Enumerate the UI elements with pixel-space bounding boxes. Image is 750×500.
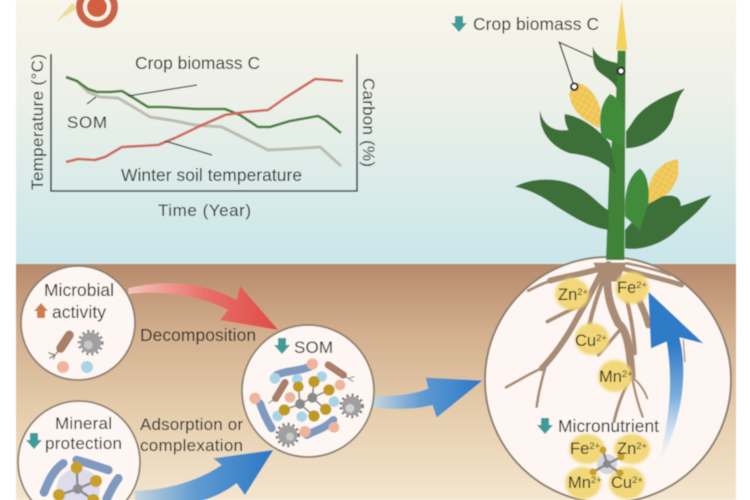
label: winter soil temperature: Winter soil temperature [121, 165, 302, 185]
callout lines [559, 42, 593, 87]
icon: mineral complex [44, 460, 118, 500]
panel: SOM [242, 325, 374, 457]
label: SOM: SOM [294, 338, 333, 357]
arrow: SOM to micronutrient [373, 378, 482, 418]
ion: Zn: Zn [558, 286, 577, 304]
label: x axis: Time (Year) [158, 201, 251, 220]
icon: peach particle [57, 361, 69, 373]
illustration: roots [506, 263, 685, 422]
icon: down arrow [26, 433, 42, 449]
line: crop biomass C [66, 77, 341, 133]
icon: bacterium [48, 335, 69, 359]
upper corn cob [569, 83, 601, 128]
label: left y axis: Temperature (°C) [28, 54, 47, 190]
panel: soil background [16, 264, 736, 500]
panel: microbial activity [21, 266, 135, 380]
label: adsorption or complexation [140, 415, 243, 455]
ion: Cu [575, 323, 609, 355]
illustration: micronutrient complex [565, 434, 650, 499]
arrow: adsorption [135, 450, 273, 500]
illustration: micronutrient complex: 2+ [632, 475, 643, 486]
icon: down arrow [274, 338, 290, 354]
leader lines [87, 85, 212, 155]
illustration: micronutrient complex: 2+ [589, 441, 601, 452]
panel: mineral protection [18, 401, 140, 500]
icon: down arrow [537, 418, 553, 434]
illustration: micronutrient complex: 2+ [636, 441, 648, 452]
ion: Cu: 2+ [596, 333, 607, 344]
flag leaf [593, 47, 618, 88]
lower corn cob [647, 159, 678, 204]
label: SOM: SOM [67, 113, 107, 132]
ion: Fe: Fe [617, 279, 636, 297]
upper right leaf [626, 88, 685, 148]
upper centre leaf [600, 94, 625, 147]
arrow: decomposition [128, 283, 278, 330]
ion: Zn [555, 278, 589, 310]
arrow: nutrient uptake [648, 292, 703, 468]
line: winter soil temperature [66, 79, 343, 162]
ion: Zn: 2+ [577, 287, 589, 298]
ion: Fe: 2+ [636, 280, 648, 291]
icon: spiky microbe [80, 332, 101, 353]
label: right y axis: Carbon (%) [359, 78, 378, 167]
illustration: micronutrient complex: Fe [570, 440, 589, 458]
ion: Fe [615, 272, 649, 304]
illustration: micronutrient complex: 2+ [591, 475, 602, 486]
line chart: temperature and carbon over time [28, 53, 378, 220]
illustration: maize plant [515, 0, 712, 260]
panel: sky background [16, 0, 736, 264]
ion: Mn: 2+ [622, 369, 633, 380]
label: crop biomass C: Crop biomass C [135, 53, 260, 73]
illustration: SOM particles [249, 358, 362, 445]
label: decomposition: Decomposition [140, 325, 256, 345]
label: activity: activity [52, 302, 106, 322]
label: microbial: Microbial [44, 280, 114, 300]
line: SOM [66, 77, 341, 166]
label: protection: protection [45, 434, 122, 453]
label: micronutrient: Micronutrient [558, 416, 659, 436]
upper left leaf [540, 111, 617, 175]
lower right leaf [625, 195, 712, 249]
tassel [616, 0, 627, 50]
callout dots [571, 83, 578, 90]
chart axes [51, 54, 357, 191]
lower centre leaf [625, 168, 649, 230]
stem [606, 51, 626, 260]
icon: up arrow [34, 303, 48, 318]
ion: Cu: Cu [575, 332, 596, 350]
illustration: micronutrient complex: Zn [617, 440, 636, 458]
label: mineral: Mineral [55, 414, 112, 433]
panel: root zone [485, 257, 731, 500]
illustration: micronutrient complex: Mn [568, 474, 591, 492]
icon: blue particle [81, 361, 93, 373]
ion: Mn [598, 360, 633, 392]
lower left leaf [515, 180, 608, 230]
icon: sun [56, 0, 114, 24]
illustration: micronutrient complex: Cu [611, 474, 632, 492]
heading: crop biomass C: Crop biomass C [473, 14, 599, 34]
label: adsorption or complexation: complexation [140, 436, 243, 455]
ion: Mn: Mn [599, 368, 622, 386]
label: adsorption or complexation: Adsorption or [140, 415, 243, 434]
